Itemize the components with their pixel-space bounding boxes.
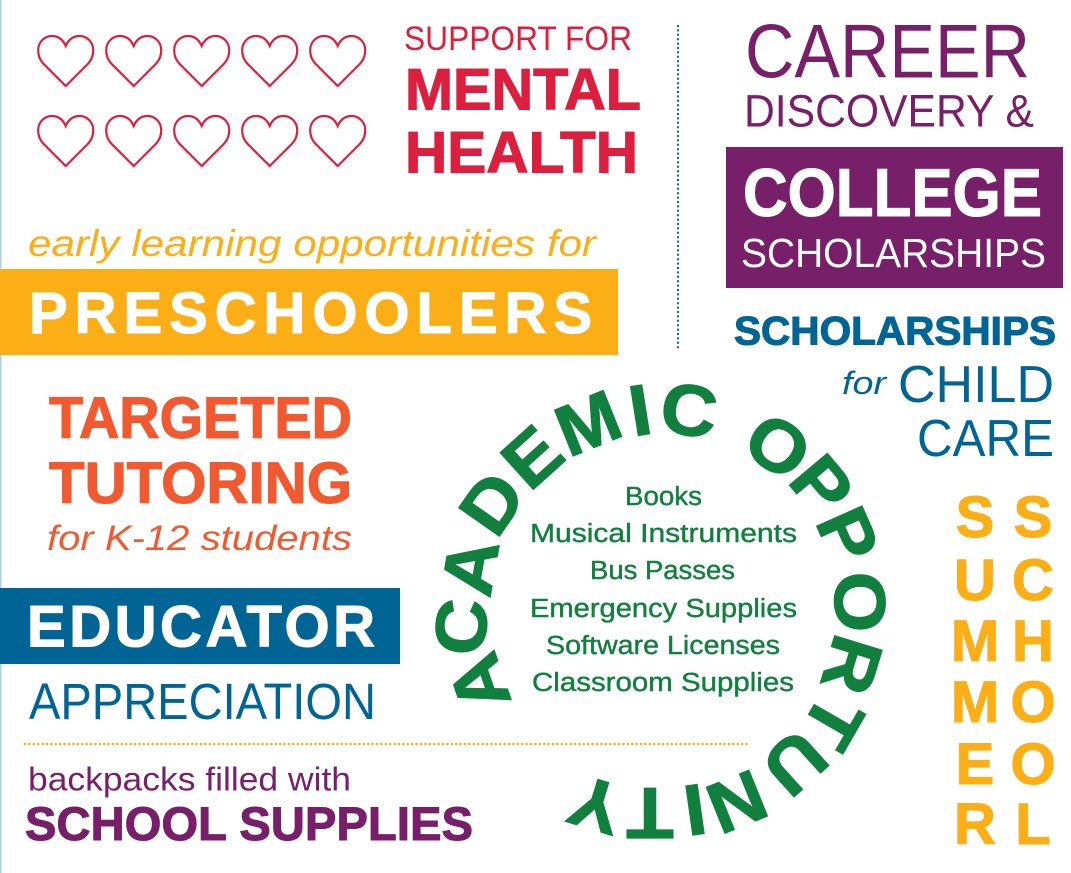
circular heading: academic opportunity: O bbox=[819, 570, 901, 634]
heading: support for mental health: HEALTH bbox=[405, 120, 638, 186]
circular heading: academic opportunity: I bbox=[623, 368, 657, 452]
heading: support for mental health: MENTAL bbox=[405, 58, 641, 122]
vertical text: summer bbox=[951, 485, 999, 857]
text: backpacks school supplies: backpacks filled with bbox=[28, 760, 351, 798]
circular heading: academic opportunity: C bbox=[418, 596, 504, 658]
text: backpacks school supplies bbox=[25, 760, 473, 850]
list: funded items: Classroom Supplies bbox=[532, 669, 794, 697]
circular heading: academic opportunity: R bbox=[805, 626, 899, 704]
circular heading: academic opportunity: O bbox=[730, 396, 826, 496]
circular heading: academic opportunity: C bbox=[656, 366, 722, 454]
banner: educator appreciation bbox=[0, 588, 400, 730]
vertical text: school: L bbox=[1015, 792, 1051, 857]
vertical text: summer: E bbox=[956, 732, 994, 797]
vertical text: summer: M bbox=[951, 609, 999, 674]
banner: preschoolers bbox=[0, 269, 618, 355]
circular heading: academic opportunity: M bbox=[544, 375, 632, 472]
circular heading: academic opportunity: D bbox=[443, 457, 541, 549]
vertical text: summer: S bbox=[956, 485, 994, 550]
list: funded items: Books bbox=[625, 483, 702, 511]
circular heading: academic opportunity: A bbox=[425, 532, 515, 602]
circular heading: academic opportunity: E bbox=[486, 410, 578, 504]
heading: support for mental health: SUPPORT FOR bbox=[404, 20, 632, 58]
circular heading: academic opportunity: A bbox=[432, 643, 526, 723]
text: scholarships for child care: SCHOLARSHIPS bbox=[734, 310, 1056, 354]
circular heading: academic opportunity: N bbox=[696, 754, 778, 850]
circular heading: academic opportunity: T bbox=[786, 681, 880, 763]
circular heading: academic opportunity: T bbox=[626, 773, 674, 853]
circular heading: academic opportunity: P bbox=[774, 439, 870, 531]
icon grid: ten hearts bbox=[38, 36, 365, 166]
circular heading: academic opportunity: P bbox=[801, 495, 895, 575]
text: scholarships for child care: CARE bbox=[917, 410, 1054, 468]
list: funded items: Musical Instruments bbox=[530, 520, 797, 548]
heading: targeted tutoring bbox=[47, 386, 352, 558]
vertical text: school: H bbox=[1012, 609, 1054, 674]
text: early learning opportunities: early learning opportunities for bbox=[28, 223, 598, 264]
heading: targeted tutoring: for K-12 students bbox=[47, 519, 352, 558]
banner: educator appreciation: EDUCATOR bbox=[27, 594, 375, 660]
panel: college scholarships: COLLEGE bbox=[743, 155, 1042, 231]
vertical text: school: O bbox=[1010, 732, 1056, 797]
heading: targeted tutoring: TARGETED bbox=[49, 386, 352, 451]
circular heading: academic opportunity: I bbox=[679, 769, 711, 851]
vertical text: school: C bbox=[1012, 548, 1054, 613]
circular heading: academic opportunity bbox=[418, 366, 901, 853]
list: funded items: Software Licenses bbox=[546, 632, 780, 660]
vertical text: school: S bbox=[1014, 485, 1052, 550]
list: funded items bbox=[530, 483, 797, 697]
heading: career discovery: DISCOVERY & bbox=[744, 86, 1034, 136]
list: funded items: Bus Passes bbox=[590, 557, 735, 585]
vertical text: summer: R bbox=[954, 792, 996, 857]
heading: support for mental health bbox=[404, 20, 641, 186]
text: backpacks school supplies: SCHOOL SUPPLIES bbox=[25, 797, 473, 850]
vertical text: school: O bbox=[1010, 670, 1056, 735]
panel: college scholarships bbox=[726, 147, 1063, 288]
vertical text: summer: U bbox=[954, 548, 996, 613]
text: scholarships for child care bbox=[734, 310, 1056, 468]
circular heading: academic opportunity: Y bbox=[559, 759, 633, 851]
circular heading: academic opportunity: U bbox=[747, 714, 843, 812]
banner: educator appreciation: APPRECIATION bbox=[29, 673, 376, 730]
heading: career discovery: CAREER bbox=[745, 10, 1030, 94]
heading: targeted tutoring: TUTORING bbox=[49, 451, 352, 516]
vertical text: summer: M bbox=[951, 670, 999, 735]
heading: career discovery bbox=[744, 10, 1034, 136]
text: scholarships for child care: CHILD bbox=[898, 356, 1054, 414]
panel: college scholarships: SCHOLARSHIPS bbox=[741, 230, 1046, 276]
text: scholarships for child care: for bbox=[842, 365, 888, 401]
list: funded items: Emergency Supplies bbox=[530, 595, 797, 623]
banner: preschoolers: PRESCHOOLERS bbox=[29, 281, 592, 346]
vertical text: school bbox=[1010, 485, 1056, 857]
